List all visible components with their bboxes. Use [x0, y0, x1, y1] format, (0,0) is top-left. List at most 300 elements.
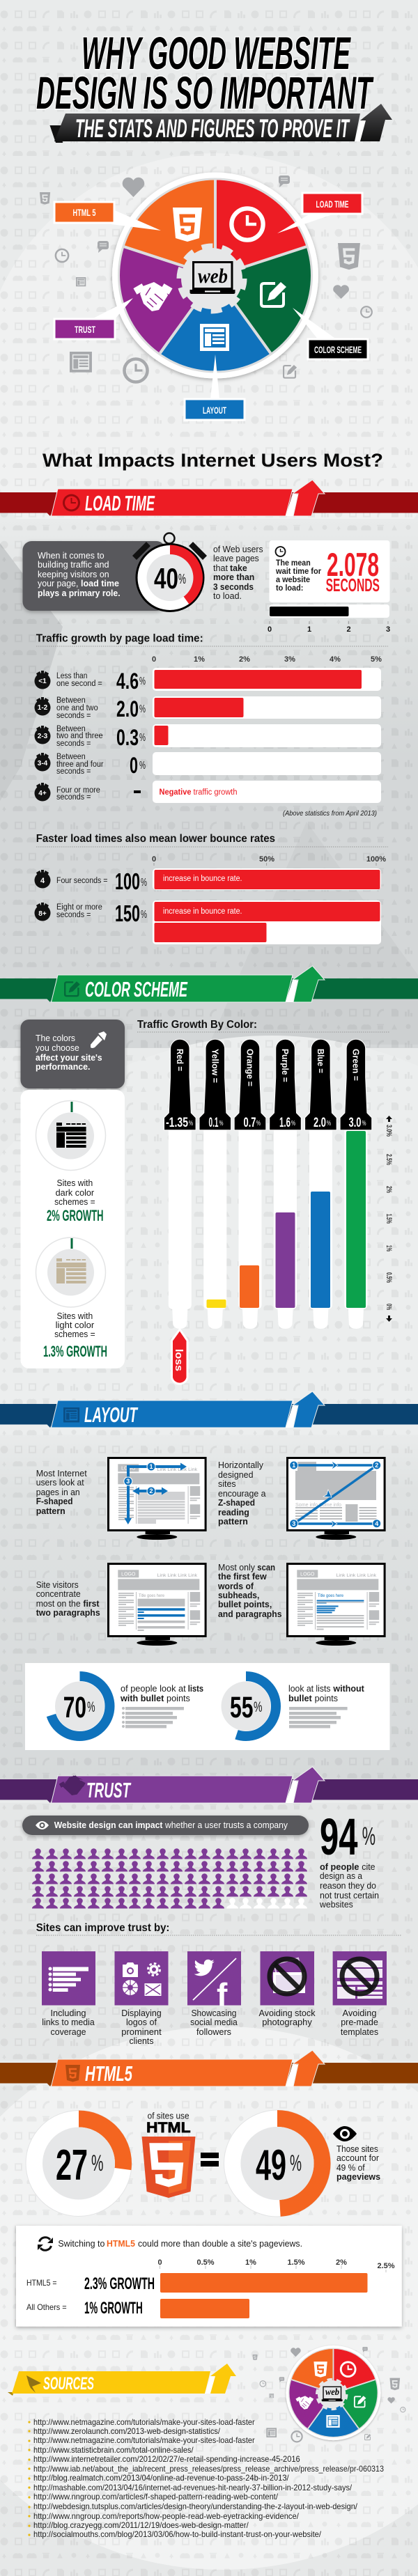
- chart: traffic growth by load time: [35, 655, 382, 818]
- text: light color growth: 1.3% GROWTH: [43, 1343, 107, 1360]
- tip: avoid stock photography: photography: [262, 2017, 312, 2027]
- chart axis: 2.5%: [377, 2262, 395, 2270]
- donut: 70 percent: 70: [63, 1691, 86, 1724]
- card: mean wait time: a website: [276, 576, 310, 584]
- panel: dark vs light schemes: [21, 1090, 125, 1368]
- tip: media coverage: coverage: [50, 2027, 86, 2037]
- monitor: first words highlighted: [287, 1564, 385, 1646]
- row: three to four seconds: three and four: [56, 760, 104, 769]
- vertical axis: 3.0%: [385, 1125, 393, 1137]
- row: one to two seconds: %: [139, 703, 146, 715]
- text: z-shaped pattern: Z-shaped: [218, 1497, 255, 1508]
- donut: 55 percent: 55: [230, 1691, 254, 1724]
- chart: bounce rates: [35, 855, 386, 944]
- laptop word: web: web: [198, 265, 228, 288]
- panel: switching to html5: [16, 2226, 402, 2327]
- stat: 94 percent: not trust certain: [320, 1890, 379, 1900]
- banner: load time: [0, 480, 418, 516]
- stat: 94 percent: [319, 1808, 379, 1910]
- title: [36, 27, 374, 118]
- row: one to two seconds: 1-2: [38, 704, 48, 712]
- row: eight or more seconds: 150: [115, 900, 140, 926]
- icon: eye: [333, 2126, 357, 2141]
- tip: media coverage: links to media: [42, 2017, 95, 2027]
- column: blue: Blue =: [316, 1049, 326, 1073]
- row: two to three seconds: two and three: [56, 732, 103, 740]
- banner title: HTML5: [85, 2061, 132, 2086]
- chart axis: 50%: [259, 855, 274, 864]
- card: mean wait time: [269, 540, 390, 602]
- chart axis: 2%: [336, 2258, 347, 2267]
- arrows: z path: 1: [292, 1462, 295, 1469]
- text: lists with bullets: lists: [188, 1683, 203, 1694]
- row: four or more seconds: traffic growth: [194, 788, 237, 797]
- row: four seconds: 4: [40, 877, 45, 885]
- row: two to three seconds: 2-3: [38, 733, 48, 740]
- text: first two paragraphs: concentrate: [36, 1588, 81, 1599]
- column: yellow: 0.1: [209, 1116, 219, 1130]
- small wheel word: web: web: [325, 2387, 339, 2398]
- tip: client logos: prominent: [121, 2027, 162, 2037]
- card: mean wait time: wait time for: [275, 568, 322, 576]
- row: four or more seconds: Negative: [159, 788, 191, 797]
- text: light color growth: Sites with: [57, 1311, 93, 1321]
- row: eight or more seconds: seconds =: [56, 911, 91, 919]
- icon: clock: [63, 494, 80, 511]
- label: color scheme: COLOR SCHEME: [314, 344, 362, 355]
- stat: 94 percent: reason they do: [320, 1880, 376, 1891]
- text: of web users leave pages: to load.: [213, 591, 242, 601]
- text: first two paragraphs: first: [83, 1598, 100, 1609]
- row: under one second: %: [139, 676, 146, 687]
- bar: wait time scale: 1: [307, 625, 311, 634]
- label: load time: [302, 193, 362, 214]
- row: three to four seconds: 3-4: [38, 760, 48, 767]
- text: of web users leave pages: more than: [213, 572, 254, 582]
- label: layout: [185, 399, 245, 420]
- sources list: http://www.zerolaunch.com/2013-web-design-statistics/: [33, 2426, 221, 2436]
- banner: html5: [0, 2050, 418, 2086]
- small wheel: [253, 2327, 405, 2447]
- equals sign: [201, 2153, 219, 2167]
- column: blue: %: [327, 1120, 331, 1127]
- text: dark color growth: [47, 1178, 103, 1224]
- tip: client logos: [114, 1951, 169, 2046]
- text: lists without bullets: look at lists: [288, 1683, 331, 1694]
- panel: colors affect performance: performance.: [36, 1061, 91, 1072]
- text: dark color growth: dark color: [56, 1187, 95, 1198]
- column: yellow: %: [219, 1120, 224, 1127]
- text: dark color growth: schemes =: [54, 1196, 95, 1207]
- tip: media coverage: Including: [50, 2008, 86, 2018]
- text: of web users leave pages: take: [230, 563, 247, 573]
- tip: social followers: social media: [190, 2017, 238, 2027]
- bar: wait time scale: 3: [386, 625, 390, 634]
- stat: 94 percent: of people: [320, 1861, 359, 1872]
- switching caption: HTML5: [107, 2238, 135, 2249]
- vertical axis: 2.5%: [385, 1154, 393, 1165]
- vertical axis: 1%: [385, 1245, 393, 1251]
- row: four seconds: 100: [115, 868, 140, 894]
- sources list: http://socialmouths.com/blog/2013/03/06/how-to-build-instant-trust-on-your-website/: [33, 2529, 322, 2539]
- label: HTML 5: HTML 5: [72, 207, 96, 218]
- panel: load time intro: keeping visitors on: [38, 569, 109, 579]
- tip: social followers: f: [217, 1976, 228, 2013]
- sources list: http://blog.crazyegg.com/2011/12/19/does-web-design-matter/: [33, 2520, 249, 2530]
- text: scan first words: bullet points,: [218, 1599, 272, 1609]
- wheel artwork: [40, 132, 372, 393]
- row: four seconds: Four seconds =: [56, 877, 108, 885]
- panel: colors affect performance: [21, 1020, 125, 1088]
- banner: sources: [8, 2364, 236, 2396]
- arrows: f path: [124, 1462, 187, 1524]
- panel: load time intro: load time: [81, 578, 119, 588]
- text: z-shaped pattern: [218, 1460, 266, 1527]
- callout: website design impact: Website design can impact: [54, 1820, 163, 1830]
- chart axis: 0: [152, 855, 156, 864]
- bar: wait time scale: 2: [346, 625, 351, 634]
- row: three to four seconds: %: [139, 760, 146, 772]
- row: eight or more seconds: [35, 900, 381, 944]
- text: z-shaped pattern: designed: [218, 1469, 254, 1480]
- arrows: z path: 2: [375, 1462, 378, 1469]
- row: eight or more seconds: Eight or more: [56, 903, 102, 912]
- text: of web users leave pages: [213, 544, 263, 601]
- text: dark color growth: Sites with: [57, 1178, 93, 1188]
- panel: load time intro: When it comes to: [38, 550, 104, 561]
- text: f-shaped pattern: pages in an: [36, 1487, 80, 1497]
- text: first two paragraphs: two paragraphs: [36, 1607, 100, 1618]
- switching caption: Switching to: [58, 2238, 104, 2249]
- text: lists with bullets: of people look at: [121, 1683, 186, 1694]
- text: f-shaped pattern: pattern: [36, 1506, 65, 1516]
- html5 logo with caption: HTML: [146, 2120, 191, 2136]
- heading: what impacts internet users most: What Impacts Internet Users Most?: [42, 450, 383, 471]
- donut: 55 percent: %: [254, 1699, 262, 1715]
- chart axis: [152, 855, 386, 866]
- row: one to two seconds: 2.0: [116, 696, 139, 721]
- text: light color growth: light color: [56, 1320, 95, 1330]
- chart axis: 0: [152, 655, 156, 664]
- text: scan first words: scan: [257, 1562, 275, 1572]
- html5 logo with caption: [142, 2111, 195, 2198]
- donut: 27 percent of sites: %: [91, 2150, 103, 2176]
- column: orange: %: [256, 1120, 261, 1127]
- row: one to two seconds: one and two: [56, 704, 98, 712]
- icon: handshake: [59, 1775, 86, 1795]
- tip: avoid stock photography: Avoiding stock: [259, 2008, 316, 2018]
- switching caption: [58, 2238, 302, 2249]
- vertical axis: 0%: [385, 1304, 393, 1310]
- row: html5 growth: 2.3% GROWTH: [84, 2274, 155, 2293]
- row: others growth: [26, 2299, 249, 2318]
- monitor: z pattern: [287, 1458, 385, 1540]
- text: scan first words: Most only: [218, 1562, 255, 1572]
- column: green: 3.0: [348, 1116, 361, 1130]
- callout: website design impact: whether a user trusts a company: [164, 1820, 288, 1830]
- row: under one second: <1: [38, 678, 47, 685]
- row: under one second: [35, 668, 381, 694]
- stat: 94 percent: 94: [320, 1808, 358, 1866]
- icon: edit: [65, 981, 80, 996]
- arrows: f path: 3: [126, 1478, 130, 1485]
- people grid: 94 of 100: [32, 1848, 307, 1908]
- card: mean wait time: The mean: [276, 559, 311, 568]
- text: light color growth: schemes =: [54, 1329, 95, 1339]
- panel: load time intro: your page,: [38, 578, 78, 588]
- column: purple: [270, 1039, 301, 1329]
- row: two to three seconds: Between: [56, 725, 86, 733]
- text: light color growth: [43, 1311, 107, 1360]
- column: purple: %: [291, 1120, 295, 1127]
- chart axis: [158, 2258, 395, 2272]
- panel: colors affect performance: you choose: [36, 1043, 79, 1053]
- sources list: http://www.nngroup.com/articles/f-shaped-pattern-reading-web-content/: [33, 2492, 279, 2501]
- text: first two paragraphs: Site visitors: [36, 1579, 79, 1590]
- row: under one second: 4.6: [116, 669, 139, 694]
- row: eight or more seconds: 8+: [38, 910, 47, 918]
- arrows: f path: 1: [149, 1463, 153, 1470]
- row: three to four seconds: Between: [56, 753, 86, 761]
- column: green: Green =: [350, 1049, 361, 1081]
- panel: load time intro: plays a primary role.: [38, 588, 121, 598]
- column: orange: Orange =: [245, 1049, 255, 1086]
- column: purple: Purple =: [280, 1049, 291, 1082]
- chart axis: 3%: [284, 655, 295, 664]
- panel: colors affect performance: affect your site's: [36, 1052, 102, 1063]
- text: lists without bullets: points: [315, 1693, 338, 1703]
- icon: eyedropper: [91, 1031, 107, 1048]
- row: one to two seconds: Between: [56, 696, 86, 705]
- column: yellow: Yellow =: [210, 1049, 220, 1083]
- tip: client logos: Displaying: [121, 2008, 162, 2018]
- stopwatch 40 percent: %: [178, 572, 186, 587]
- icon: html5 shield: [65, 2065, 80, 2082]
- chart axis: 1%: [194, 655, 205, 664]
- text: lists without bullets: without: [332, 1683, 364, 1694]
- donut: 70 percent: %: [87, 1699, 95, 1715]
- callout: website design impact: [22, 1816, 309, 1835]
- vertical axis: 1.5%: [385, 1214, 393, 1224]
- heading: sites can improve trust: Sites can improve trust by:: [36, 1922, 169, 1934]
- text: of web users leave pages: of Web users: [213, 544, 263, 554]
- row: two to three seconds: 0.3: [116, 725, 139, 750]
- banner title: COLOR SCHEME: [85, 977, 188, 1001]
- text: scan first words: and paragraphs: [218, 1609, 281, 1619]
- banner: layout: [0, 1391, 418, 1428]
- chart: traffic growth by color: [164, 1039, 393, 1384]
- banner title: LOAD TIME: [85, 491, 155, 515]
- column: red: %: [189, 1120, 193, 1127]
- sources list: http://www.netmagazine.com/tutorials/make-your-sites-load-faster: [33, 2435, 255, 2445]
- arrows: z path: 4: [375, 1520, 378, 1527]
- monitor: first paragraphs highlighted: Title goes here: [139, 1594, 165, 1598]
- tip: media coverage: [42, 1951, 95, 2037]
- label: load time: LOAD TIME: [316, 198, 348, 210]
- stat: 94 percent: %: [362, 1822, 376, 1850]
- banner: color scheme: [0, 966, 418, 1002]
- donut: 55 percent: [216, 1676, 276, 1736]
- pointer wedges: [92, 209, 337, 399]
- heading: traffic growth by color: Traffic Growth By Color:: [137, 1019, 257, 1031]
- text: pageviews with eye icon: pageviews: [336, 2171, 380, 2182]
- monitor: first words highlighted: Title goes here: [318, 1594, 344, 1598]
- text: scan first words: [217, 1562, 281, 1619]
- label: HTML 5: [54, 202, 114, 223]
- row: under one second: one second =: [56, 680, 102, 688]
- dark site dial: [36, 1100, 106, 1170]
- light site dial: [36, 1238, 106, 1307]
- row: four or more seconds: 4+: [38, 790, 47, 797]
- row: others growth: All Others =: [26, 2302, 67, 2312]
- donut: 49 percent of pageviews: [224, 2110, 330, 2217]
- donut: 49 percent of pageviews: %: [290, 2150, 302, 2176]
- tip: avoid pre-made templates: templates: [341, 2027, 379, 2037]
- row: one to two seconds: seconds =: [56, 712, 91, 720]
- text: pageviews with eye icon: 49 % of: [336, 2162, 365, 2173]
- tip: social followers: [187, 1951, 241, 2037]
- row: one to two seconds: [35, 696, 381, 721]
- column: green: [340, 1039, 372, 1329]
- vertical axis: [385, 1116, 393, 1322]
- label: color scheme: [308, 339, 368, 359]
- stat: 94 percent: websites: [319, 1899, 353, 1910]
- monitor: first paragraphs highlighted: [109, 1564, 206, 1646]
- sources list: http://www.statisticbrain.com/total-online-sales/: [33, 2445, 194, 2455]
- column: orange: 0.7: [244, 1116, 256, 1130]
- text: f-shaped pattern: Most Internet: [36, 1468, 87, 1478]
- label: trust: TRUST: [75, 324, 95, 335]
- text: z-shaped pattern: sites: [218, 1478, 236, 1489]
- text: of web users leave pages: 3 seconds: [213, 581, 254, 592]
- column: yellow: [199, 1039, 231, 1329]
- bar: wait time scale: [268, 604, 390, 634]
- vertical axis: 2%: [385, 1186, 393, 1193]
- text: scan first words: words of: [217, 1581, 254, 1591]
- subtitle ribbon with arrow: [50, 104, 392, 143]
- row: four or more seconds: Four or more: [56, 786, 100, 795]
- donut: 70 percent: [50, 1676, 110, 1736]
- column: red: -1.35: [166, 1116, 188, 1130]
- note: statistics date: (Above statistics from April 2013): [283, 809, 377, 818]
- wheel diagram: [40, 132, 372, 420]
- card: mean wait time: 2.078: [327, 546, 379, 583]
- text: scan first words: the first few: [218, 1571, 267, 1582]
- text: f-shaped pattern: F-shaped: [36, 1496, 73, 1506]
- column: purple: 1.6: [279, 1116, 291, 1130]
- text: of web users leave pages: leave pages: [213, 553, 259, 563]
- text: lists without bullets: bullet: [288, 1693, 312, 1703]
- sources list: http://www.iab.net/about_the_iab/recent_press_releases/press_release_archive/press_release/pr-060313: [33, 2464, 384, 2474]
- banner title: SOURCES: [43, 2374, 94, 2394]
- chart axis: 1%: [245, 2258, 256, 2267]
- stat: 94 percent: design as a: [320, 1871, 363, 1881]
- icon: paper plane: [26, 2375, 41, 2393]
- card: mean wait time: SECONDS: [326, 575, 380, 595]
- row: others growth: 1% GROWTH: [84, 2299, 143, 2318]
- sources list: http://www.internetretailer.com/2012/02/27/e-retail-spending-increase-45-2016: [33, 2454, 300, 2464]
- tip: avoid pre-made templates: [333, 1951, 387, 2037]
- sources list: http://webdesign.tutsplus.com/articles/design-theory/understanding-the-z-layout-in-web-design/: [33, 2501, 358, 2511]
- text: z-shaped pattern: encourage a: [218, 1488, 266, 1499]
- sources list: http://www.nngroup.com/reports/how-people-read-web-eyetracking-evidence/: [33, 2511, 299, 2521]
- label: layout: LAYOUT: [203, 405, 226, 416]
- row: under one second: Less than: [56, 672, 87, 680]
- arrows: z path: 3: [292, 1520, 295, 1527]
- switching caption: could more than double a site's pageviews.: [138, 2238, 302, 2249]
- icon: layout: [63, 1407, 79, 1422]
- banner title: LAYOUT: [84, 1403, 139, 1427]
- chart axis: 0: [158, 2258, 162, 2267]
- icon: refresh: [38, 2238, 53, 2250]
- chart axis: 5%: [371, 655, 382, 664]
- chart axis: 2%: [239, 655, 250, 664]
- sources list: http://www.netmagazine.com/tutorials/make-your-sites-load-faster: [33, 2417, 255, 2427]
- chart axis: 0.5%: [196, 2258, 215, 2267]
- column: orange: [234, 1039, 266, 1329]
- column: blue: [305, 1039, 336, 1329]
- text: dark color growth: 2% GROWTH: [47, 1207, 103, 1224]
- sources list: http://mashable.com/2013/04/16/internet-ad-revenues-hit-nearly-37-billion-in-2012-study-says/: [33, 2483, 353, 2492]
- stopwatch 40 percent: [132, 533, 207, 611]
- card: mean wait time: to load:: [276, 584, 303, 593]
- row: two to three seconds: %: [139, 732, 146, 744]
- panel: load time intro: building traffic and: [38, 559, 109, 570]
- arrows: f path: 2: [149, 1488, 153, 1494]
- row: three to four seconds: 0: [130, 753, 138, 778]
- text: first two paragraphs: [36, 1579, 100, 1618]
- sources list: [28, 2417, 384, 2539]
- stopwatch 40 percent: 40: [154, 562, 178, 595]
- column: green: %: [362, 1120, 366, 1127]
- banner title: TRUST: [86, 1778, 132, 1802]
- row: four seconds: [35, 868, 381, 894]
- row: four seconds: increase in bounce rate.: [163, 875, 242, 883]
- html5 logo with caption: of sites use: [148, 2111, 189, 2121]
- bar: wait time scale: 0: [268, 625, 272, 634]
- panel: colors affect performance: The colors: [36, 1033, 75, 1043]
- chart axis: 1.5%: [287, 2258, 305, 2267]
- row: four seconds: %: [141, 877, 147, 889]
- text: f-shaped pattern: [36, 1468, 87, 1516]
- heading: traffic growth by page load time: Traffic growth by page load time:: [36, 632, 203, 645]
- text: pageviews with eye icon: Those sites: [336, 2144, 378, 2154]
- column: red: loss: [173, 1349, 185, 1371]
- panel: load time intro: [22, 541, 166, 611]
- row: html5 growth: [26, 2273, 368, 2293]
- row: two to three seconds: seconds =: [56, 740, 91, 748]
- arrows: z path: [290, 1461, 381, 1528]
- column: red: [164, 1039, 196, 1384]
- icon: eye: [36, 1821, 49, 1829]
- row: eight or more seconds: increase in bounce rate.: [163, 907, 242, 916]
- sources list: http://blog.realmatch.com/2013/04/online-ad-revenue-to-pass-24b-in-2013/: [33, 2473, 289, 2483]
- text: pageviews with eye icon: [333, 2126, 380, 2182]
- tip: social followers: Showcasing: [191, 2008, 237, 2018]
- donut: 49 percent of pageviews: 49: [256, 2141, 286, 2189]
- monitor: z pattern: Some info Some info: [295, 1503, 341, 1508]
- monitor: f pattern: [109, 1458, 206, 1540]
- tip: avoid pre-made templates: Avoiding: [343, 2008, 376, 2018]
- chart axis: 4%: [330, 655, 341, 664]
- column: blue: 2.0: [314, 1116, 326, 1130]
- row: eight or more seconds: %: [141, 909, 147, 921]
- text: z-shaped pattern: Horizontally: [218, 1460, 263, 1470]
- panel: bullet point stats: [25, 1663, 390, 1750]
- text: scan first words: subheads,: [218, 1590, 259, 1600]
- text: lists with bullets: points: [167, 1693, 190, 1703]
- stat: 94 percent: cite: [362, 1861, 375, 1872]
